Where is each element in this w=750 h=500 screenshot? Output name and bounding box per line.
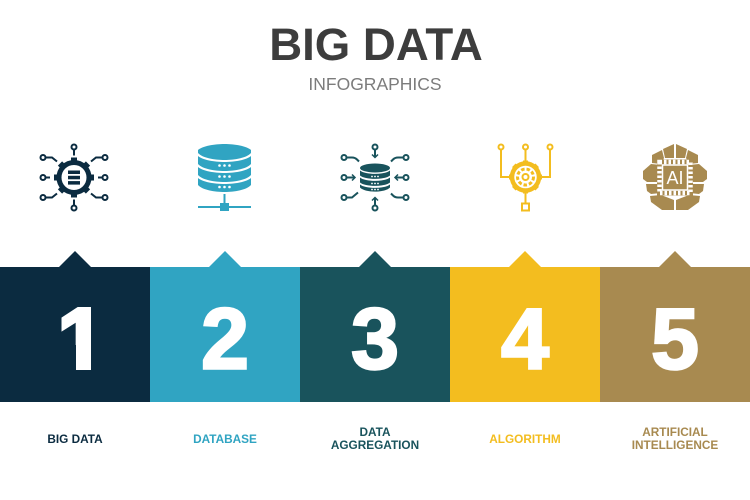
label 3: AGGREGATION: [331, 438, 419, 452]
panel 3: [300, 251, 450, 402]
subtitle: INFOGRAPHICS: [308, 74, 442, 94]
icon: artificial intelligence brain: AI: [666, 168, 684, 188]
label 5: ARTIFICIAL: [642, 424, 708, 438]
panel 3: 3: [351, 292, 399, 388]
label 4: ALGORITHM: [489, 432, 561, 446]
panel 5: [600, 251, 750, 402]
icon: algorithm: [498, 144, 552, 210]
label 3: [331, 424, 419, 452]
icon: data aggregation: [342, 144, 408, 210]
title: BIG DATA: [269, 19, 483, 70]
label 5: [632, 424, 718, 452]
panel 4: 4: [501, 292, 549, 388]
label 1: BIG DATA: [47, 432, 103, 446]
panel 2: 2: [201, 292, 249, 388]
icon: database: [198, 144, 251, 211]
label 3: DATA: [359, 424, 390, 438]
icon: big data gear: [40, 144, 108, 210]
label 5: INTELLIGENCE: [632, 438, 718, 452]
panel 1: [0, 251, 150, 402]
label 2: DATABASE: [193, 432, 257, 446]
numbered panels and icons: [0, 144, 750, 402]
panel 5: 5: [651, 292, 699, 388]
panel 1: 1: [58, 292, 105, 388]
icon: artificial intelligence brain: [643, 144, 707, 210]
panel 4: [450, 251, 600, 402]
panel 2: [150, 251, 300, 402]
